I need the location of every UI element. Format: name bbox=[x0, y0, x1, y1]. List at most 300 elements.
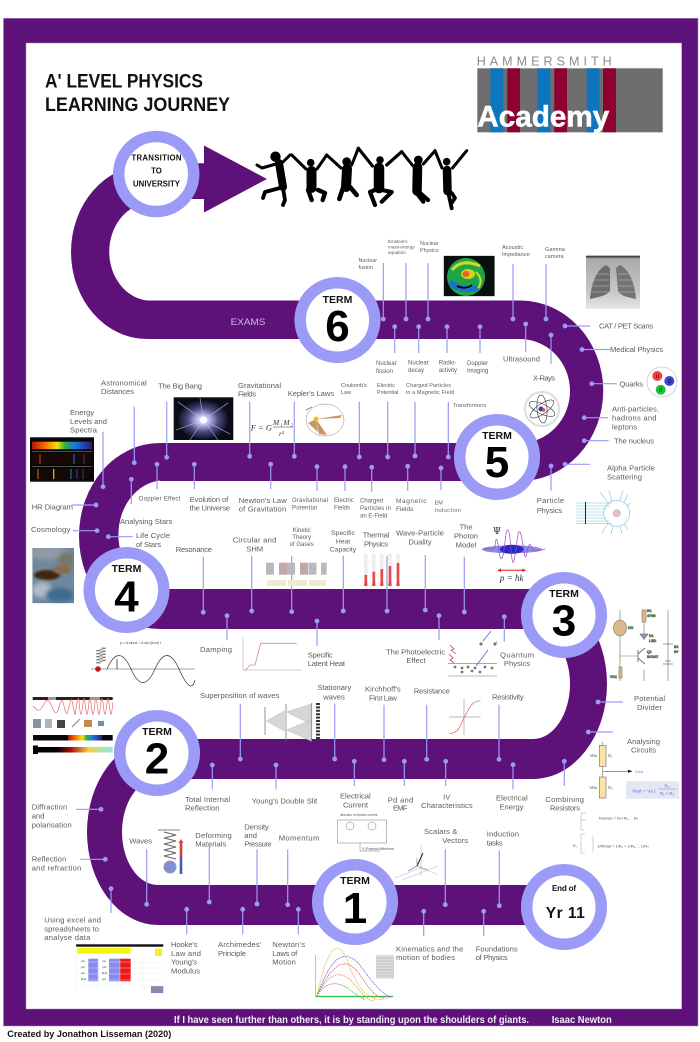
Medical Physics: Medical Physics bbox=[610, 345, 663, 354]
Reflection and refraction: and refraction bbox=[32, 863, 81, 872]
Newton's Laws of Motion: Motion bbox=[272, 958, 296, 967]
Induction tasks: Induction bbox=[487, 829, 519, 838]
Deforming Materials: Materials bbox=[195, 840, 227, 849]
formula: potential divider: R₂ bbox=[665, 784, 670, 788]
term 4 circle: 4 bbox=[114, 572, 139, 622]
Foundations of Physics bbox=[476, 909, 518, 962]
Charged Particles in a Magnetic Field bbox=[406, 383, 454, 458]
term 5 circle bbox=[460, 420, 534, 494]
Reflection and refraction: Reflection bbox=[32, 854, 66, 863]
Alpha Particle Scattering: Scattering bbox=[607, 472, 642, 482]
diagram: resistor potential divider: VRs bbox=[590, 785, 597, 790]
Diffraction and polarisation: and bbox=[32, 811, 44, 820]
Wave-Particle Duality: Wave-Particle bbox=[396, 529, 444, 538]
Energy Levels and Spectra: Spectra bbox=[70, 426, 98, 435]
Induction tasks: tasks bbox=[487, 838, 503, 847]
Potential Divider: Potential bbox=[634, 694, 665, 703]
journey ribbon bbox=[71, 165, 607, 925]
diagram: SHM graph bbox=[91, 641, 195, 686]
Evolution of the Universe: the Universe bbox=[190, 503, 230, 512]
diagram: Kepler's laws bbox=[306, 404, 344, 436]
Nuclear Physics: Physics bbox=[420, 248, 439, 254]
diagram: alpha scattering bbox=[576, 490, 630, 534]
Acoustic Impedance: Impedance bbox=[502, 252, 530, 258]
Anti-particles, hadrons and leptons: leptons bbox=[612, 422, 637, 431]
formula: potential divider bbox=[626, 781, 679, 799]
Electrical Current: Electrical bbox=[340, 792, 371, 801]
diagram: SHM graph: y = A sinωt = A sin√(k/m) t bbox=[120, 641, 161, 645]
icon: quarks: d bbox=[659, 388, 662, 394]
Pd and EMF: Pd and bbox=[388, 795, 413, 804]
Damping bbox=[200, 613, 232, 654]
Kepler's Laws: Kepler's Laws bbox=[288, 389, 334, 398]
Analysing Stars: Analysing Stars bbox=[120, 517, 173, 526]
Deforming Materials: Deforming bbox=[195, 831, 232, 840]
Kinematics and the motion of bodies: motion of bodies bbox=[396, 953, 455, 962]
Density and Pressure: Density bbox=[244, 822, 269, 831]
term 2 circle: TERM bbox=[142, 726, 172, 738]
Newton's Law of Gravitation bbox=[239, 462, 287, 514]
Analysing Circuits: Circuits bbox=[631, 745, 656, 754]
EM Induction bbox=[435, 466, 461, 514]
Radio-activity: Radio- bbox=[439, 360, 456, 366]
Potential Divider bbox=[596, 694, 665, 712]
Foundations of Physics: of Physics bbox=[476, 953, 508, 962]
Circular and SHM: SHM bbox=[246, 544, 263, 553]
diagram: transistor circuit: D1 bbox=[649, 634, 654, 638]
exams label: EXAMS bbox=[231, 317, 265, 328]
Charged Particles in an E-Field: an E-Field bbox=[360, 513, 387, 519]
IV Characteristics: Characteristics bbox=[421, 801, 473, 810]
Acoustic Impedance bbox=[502, 245, 530, 321]
Kinetic Theory of Gases: Kinetic bbox=[293, 528, 311, 534]
Nuclear Physics: Nuclear bbox=[420, 241, 439, 247]
Coulomb's Law: Law bbox=[341, 390, 351, 396]
icon: quarks: u bbox=[656, 374, 659, 380]
Analysing Stars bbox=[120, 477, 173, 526]
diagram: electric circuit: V (Potential difference) bbox=[362, 847, 394, 851]
Waves: Waves bbox=[129, 837, 152, 846]
image: emission spectra bbox=[30, 437, 94, 482]
Quarks bbox=[589, 380, 643, 389]
image: spreadsheet: μd bbox=[81, 971, 85, 975]
Transformers: Transformers bbox=[453, 403, 486, 409]
title: LEARNING JOURNEY bbox=[45, 95, 230, 116]
Anti-particles, hadrons and leptons: hadrons and bbox=[612, 414, 656, 422]
Superposition of waves bbox=[200, 691, 280, 761]
Astronomical Distances bbox=[101, 378, 147, 465]
formula: gravitation: r² bbox=[279, 429, 285, 438]
Ultrasound: Ultrasound bbox=[503, 355, 540, 364]
Cosmology bbox=[31, 525, 99, 534]
diagram: electric circuit: direction of electric current bbox=[340, 813, 377, 817]
Gravitational Fields: Gravitational bbox=[238, 381, 281, 390]
Kinematics and the motion of bodies: Kinematics and the bbox=[396, 944, 463, 953]
diagram: double slit interference bbox=[265, 703, 318, 742]
formula: gravitation: F = G bbox=[250, 422, 272, 432]
Coulomb's Law bbox=[341, 383, 367, 459]
diagram: wave packet: p = ħk bbox=[499, 573, 524, 583]
term 5 circle: TERM bbox=[482, 430, 512, 442]
Density and Pressure: and bbox=[244, 831, 257, 840]
image: spreadsheet: kHz bbox=[102, 971, 108, 975]
Kepler's Laws bbox=[288, 389, 334, 459]
Momentum: Momentum bbox=[279, 833, 319, 842]
diagram: transistor circuit: 9V bbox=[674, 650, 679, 654]
Magnetic Fields: Magnetic bbox=[396, 498, 427, 505]
Magnetic Fields: Fields bbox=[396, 506, 414, 513]
Newton's Laws of Motion bbox=[272, 907, 305, 967]
term 4 circle bbox=[89, 553, 164, 627]
Energy Levels and Spectra bbox=[70, 408, 107, 489]
formula: potential divider: R₁ + R₂ bbox=[660, 791, 675, 796]
term 6 circle bbox=[300, 283, 375, 357]
Analysing Circuits bbox=[586, 730, 660, 754]
Alpha Particle Scattering: Alpha Particle bbox=[607, 464, 655, 472]
Total Internal Reflection bbox=[185, 763, 230, 813]
Specific Heat Capacity bbox=[330, 530, 357, 613]
Doppler Imaging: Imaging bbox=[467, 368, 488, 374]
diagram: photoelectric effect bbox=[448, 631, 497, 676]
HR Diagram bbox=[32, 502, 98, 512]
Quantum Physics: Physics bbox=[504, 659, 530, 668]
Gravitational Potential bbox=[292, 464, 328, 512]
Reflection and refraction bbox=[32, 854, 108, 872]
Diffraction and polarisation bbox=[32, 803, 103, 829]
Total Internal Reflection: Total Internal bbox=[185, 795, 230, 804]
image: spreadsheet: μd bbox=[81, 965, 85, 969]
Nuclear fusion (upper): fusion bbox=[358, 265, 373, 271]
EM Induction: Induction bbox=[435, 508, 461, 514]
Life Cycle of Stars: Life Cycle bbox=[136, 531, 170, 540]
image: spreadsheet: mv bbox=[81, 959, 85, 963]
Newton's Laws of Motion: Laws of bbox=[272, 949, 298, 958]
The Photon Model: Model bbox=[456, 540, 477, 549]
formula: gravitation bbox=[250, 418, 293, 438]
title bbox=[45, 72, 230, 116]
diagram: transistor circuit: 470R bbox=[647, 614, 656, 618]
image: spreadsheet bbox=[76, 944, 163, 994]
The Photoelectric Effect bbox=[386, 613, 445, 665]
icon: atom bbox=[525, 392, 559, 426]
Nuclear fusion (upper): Nuclear bbox=[358, 258, 377, 264]
term 1 circle: 1 bbox=[343, 884, 367, 933]
Hooke's Law and Young's Modulus: Modulus bbox=[171, 967, 200, 976]
diagram: resistor potential divider: Vout bbox=[635, 769, 644, 774]
The Photoelectric Effect: The Photoelectric bbox=[386, 647, 445, 656]
term 5 topics bbox=[31, 378, 486, 549]
Alpha Particle Scattering bbox=[563, 462, 655, 482]
figure 5 bbox=[402, 151, 435, 202]
diagram: thermometers bbox=[364, 554, 400, 586]
Waves bbox=[129, 837, 152, 907]
Life Cycle of Stars: of Stars bbox=[136, 540, 161, 549]
diagram: transistor circuit: BC547 bbox=[647, 655, 658, 659]
diagram: wave packet bbox=[482, 527, 545, 583]
logo: Hammersmith Academy bbox=[477, 55, 663, 134]
term 1 topics bbox=[129, 822, 519, 976]
transition circle: TO bbox=[151, 167, 162, 176]
Damping: Damping bbox=[200, 645, 232, 654]
Kinetic Theory of Gases: Theory bbox=[292, 535, 311, 541]
Magnetic Fields bbox=[396, 464, 427, 513]
Scalars and Vectors: Vectors bbox=[442, 836, 468, 845]
image: spreadsheet: mv bbox=[102, 959, 106, 963]
Hooke's Law and Young's Modulus: Young's bbox=[171, 958, 197, 967]
Gamma camera: Gamma bbox=[545, 247, 566, 253]
Thermal Physics bbox=[363, 531, 390, 613]
The nucleus: The nucleus bbox=[614, 437, 654, 446]
term 6 topics bbox=[358, 239, 663, 515]
Newton's Law of Gravitation: Newton's Law bbox=[239, 496, 287, 505]
chart: projectile motion bbox=[315, 948, 394, 1001]
formula: potential divider: Vout = Vs ( bbox=[632, 788, 656, 794]
formula: combining resistors: Rseries = R₁+R₂ ... Rₙ bbox=[599, 816, 639, 820]
diagram: resistor potential divider: VRs bbox=[590, 753, 597, 758]
Kinematics and the motion of bodies bbox=[396, 909, 463, 962]
term 5 circle: 5 bbox=[485, 438, 509, 487]
Specific Latent Heat: Specific bbox=[308, 651, 333, 660]
quote footer: If I have seen further than others, it is by standing upon the shoulders of giants. bbox=[174, 1014, 529, 1026]
icon: quarks bbox=[647, 367, 677, 397]
Resistivity: Resistivity bbox=[492, 693, 524, 702]
Electrical Current bbox=[340, 759, 371, 809]
Energy Levels and Spectra: Levels and bbox=[70, 417, 107, 426]
Stationary waves: Stationary bbox=[317, 683, 352, 692]
Pd and EMF bbox=[388, 759, 413, 812]
Astronomical Distances: Astronomical bbox=[101, 378, 147, 388]
Medical Physics bbox=[580, 345, 663, 354]
Deforming Materials bbox=[195, 831, 232, 904]
Resonance bbox=[176, 545, 212, 615]
term 3 and 2 topics bbox=[32, 683, 665, 942]
Doppler Imaging bbox=[467, 324, 488, 374]
term 6 circle: TERM bbox=[323, 294, 353, 306]
HR Diagram: HR Diagram bbox=[32, 502, 73, 512]
Young's Double Slit bbox=[252, 763, 318, 805]
diagram: wave packet: Ψ bbox=[493, 527, 501, 537]
Density and Pressure bbox=[244, 822, 272, 906]
Combining Resistors bbox=[545, 759, 584, 813]
Electrical Energy: Electrical bbox=[496, 794, 528, 803]
Quantum Physics bbox=[500, 614, 534, 668]
Nuclear fission: fission bbox=[376, 369, 393, 375]
Anti-particles, hadrons and leptons: Anti-particles, bbox=[612, 404, 659, 414]
image: weather radar bbox=[444, 256, 495, 296]
figure 1 bbox=[257, 152, 290, 205]
term 2 circle bbox=[120, 716, 194, 790]
Hooke's Law and Young's Modulus: Law and bbox=[171, 949, 201, 958]
Energy Levels and Spectra: Energy bbox=[70, 408, 94, 417]
Charged Particles in an E-Field: Charged bbox=[360, 498, 383, 504]
diagram: IV curve bbox=[449, 699, 481, 735]
image: electromagnetic spectrum bbox=[33, 697, 113, 754]
term 6 circle: 6 bbox=[325, 302, 350, 351]
Charged Particles in an E-Field bbox=[360, 465, 391, 519]
Particle Physics bbox=[537, 464, 564, 515]
Diffraction and polarisation: Diffraction bbox=[32, 803, 67, 812]
Acoustic Impedance: Acoustic bbox=[502, 245, 523, 251]
icon: quarks: d bbox=[668, 379, 671, 385]
Gamma camera: camera bbox=[545, 254, 565, 260]
CAT / PET Scans bbox=[563, 322, 653, 331]
figure 3 bbox=[327, 148, 358, 199]
Kirchhoff's First Law: First Law bbox=[369, 694, 398, 703]
end of year 11 circle: End of bbox=[552, 884, 576, 893]
Doppler Effect: Doppler Effect bbox=[139, 496, 181, 502]
Hooke's Law and Young's Modulus bbox=[171, 907, 201, 976]
Electric Fields: Fields bbox=[334, 506, 350, 512]
Pd and EMF: EMF bbox=[393, 803, 408, 812]
diagram: resistor potential divider: R₁ bbox=[608, 753, 613, 758]
The Photon Model: The bbox=[459, 522, 473, 531]
Stationary waves bbox=[317, 683, 352, 761]
diagram: resistor potential divider bbox=[590, 742, 644, 799]
Foundations of Physics: Foundations bbox=[476, 944, 518, 953]
diagram: transistor circuit: R1 bbox=[647, 609, 652, 613]
Thermal Physics: Thermal bbox=[363, 531, 390, 540]
Scalars and Vectors: Scalars & bbox=[424, 827, 457, 836]
Charged Particles in a Magnetic Field: in a Magnetic Field bbox=[406, 390, 454, 396]
Cosmology: Cosmology bbox=[31, 525, 71, 534]
Einstein's mass-energy equation bbox=[388, 239, 415, 321]
title: A' LEVEL PHYSICS bbox=[45, 72, 203, 93]
end of year 11 circle: Yr 11 bbox=[546, 905, 585, 922]
diagram: gas cylinders bbox=[266, 563, 327, 586]
Electric Fields bbox=[334, 464, 354, 512]
Life Cycle of Stars bbox=[106, 531, 170, 549]
Nuclear decay: Nuclear bbox=[408, 360, 429, 366]
Charged Particles in an E-Field: Particles in bbox=[360, 506, 391, 512]
Induction tasks bbox=[487, 829, 519, 908]
figure 4 bbox=[358, 148, 402, 205]
EM Induction: EM bbox=[435, 500, 443, 506]
image: chest x-ray bbox=[586, 256, 640, 309]
Momentum bbox=[279, 833, 319, 907]
Total Internal Reflection: Reflection bbox=[185, 804, 220, 813]
diagram: transistor circuit: Q1 bbox=[647, 650, 652, 654]
Radio-activity: activity bbox=[439, 368, 457, 374]
Gamma camera bbox=[544, 247, 566, 321]
transition circle: UNIVERSITY bbox=[133, 180, 181, 189]
Nuclear fission bbox=[376, 324, 397, 375]
Electric Potential: Potential bbox=[377, 390, 398, 396]
Resistivity bbox=[492, 693, 524, 762]
Electric Potential: Electric bbox=[377, 383, 395, 389]
Gravitational Fields bbox=[238, 381, 281, 459]
The Big Bang: The Big Bang bbox=[158, 382, 202, 390]
Using excel and spreadsheets to analyse data: analyse data bbox=[44, 933, 91, 942]
Young's Double Slit: Young's Double Slit bbox=[252, 796, 318, 805]
end of year 11 circle bbox=[527, 870, 601, 944]
Radio-activity bbox=[439, 324, 457, 374]
Archimedes' Principle bbox=[218, 907, 262, 958]
Hooke's Law and Young's Modulus: Hooke's bbox=[171, 940, 198, 949]
Potential Divider: Divider bbox=[637, 703, 662, 712]
Diffraction and polarisation: polarisation bbox=[32, 820, 72, 829]
diagram: transistor circuit: LED bbox=[649, 639, 657, 643]
transition circle bbox=[119, 136, 194, 212]
Nuclear fission: Nuclear bbox=[376, 361, 397, 367]
diagram: resistor potential divider: R₂ bbox=[608, 785, 613, 790]
Electrical Current: Current bbox=[343, 800, 369, 809]
The Photoelectric Effect: Effect bbox=[406, 656, 427, 665]
Nuclear decay bbox=[408, 324, 429, 374]
Astronomical Distances: Distances bbox=[101, 387, 134, 396]
Doppler Imaging: Doppler bbox=[467, 361, 488, 367]
Kinetic Theory of Gases bbox=[289, 528, 314, 614]
diagram: transistor circuit bbox=[610, 609, 679, 681]
The Photon Model: Photon bbox=[454, 531, 478, 540]
Using excel and spreadsheets to analyse data: Using excel and bbox=[44, 916, 101, 925]
term 1 circle: TERM bbox=[340, 875, 370, 887]
Nuclear fusion (upper) bbox=[358, 258, 386, 321]
diagram: transistor circuit: B1 bbox=[674, 645, 679, 649]
Anti-particles, hadrons and leptons bbox=[582, 404, 659, 431]
Superposition of waves: Superposition of waves bbox=[200, 691, 280, 700]
Resistance: Resistance bbox=[414, 687, 450, 696]
quote footer: Isaac Newton bbox=[552, 1014, 612, 1026]
formula: combining resistors: 1/Rtotal = 1/R₁ + 1/R₂ ... 1/Rₙ bbox=[597, 844, 649, 848]
Particle Physics: Physics bbox=[537, 506, 562, 515]
Einstein's mass-energy equation: Einstein's bbox=[388, 239, 408, 244]
image: big bang bbox=[174, 397, 233, 440]
Nuclear Physics bbox=[420, 241, 439, 321]
Combining Resistors: Resistors bbox=[550, 804, 580, 813]
X-Rays: X-Rays bbox=[533, 373, 555, 382]
Electric Potential bbox=[377, 383, 398, 459]
formula: combining resistors: R₁ bbox=[573, 844, 578, 848]
Circular and SHM: Circular and bbox=[233, 536, 276, 545]
Circular and SHM bbox=[233, 536, 276, 613]
diagram: spring and mass bbox=[158, 830, 184, 874]
Kirchhoff's First Law bbox=[365, 685, 401, 762]
X-Rays bbox=[533, 333, 555, 382]
Specific Heat Capacity: Specific bbox=[331, 530, 355, 537]
Kinetic Theory of Gases: of Gases bbox=[290, 542, 314, 548]
Particle Physics: Particle bbox=[537, 496, 564, 505]
Combining Resistors: Combining bbox=[545, 795, 584, 804]
The nucleus bbox=[582, 437, 654, 446]
IV Characteristics bbox=[421, 759, 473, 810]
Einstein's mass-energy equation: equation bbox=[388, 250, 406, 255]
image: nebula bbox=[32, 548, 74, 604]
diagram: electric circuit bbox=[337, 813, 394, 851]
logo: Hammersmith Academy: Academy bbox=[477, 101, 610, 134]
Electrical Energy bbox=[496, 762, 528, 811]
Nuclear decay: decay bbox=[408, 368, 424, 374]
Einstein's mass-energy equation: mass-energy bbox=[388, 245, 415, 250]
Gravitational Potential: Gravitational bbox=[292, 498, 328, 504]
Electric Fields: Electric bbox=[334, 498, 354, 504]
Newton's Laws of Motion: Newton's bbox=[272, 940, 305, 949]
Ultrasound bbox=[503, 322, 540, 364]
image: spreadsheet: kHz bbox=[81, 977, 87, 981]
Archimedes' Principle: Principle bbox=[218, 949, 246, 958]
diagram: transistor circuit: DR bbox=[628, 626, 634, 630]
Resistance bbox=[414, 687, 450, 762]
CAT / PET Scans: CAT / PET Scans bbox=[599, 322, 653, 331]
image: spreadsheet: μd bbox=[102, 977, 106, 981]
term 3 circle bbox=[527, 578, 601, 652]
Specific Latent Heat: Latent Heat bbox=[308, 659, 346, 668]
author credit: Created by Jonathon Lisseman (2020) bbox=[7, 1029, 171, 1039]
The Photon Model bbox=[454, 522, 478, 614]
term 4 topics bbox=[176, 522, 534, 668]
term 1 circle bbox=[318, 865, 392, 939]
Gravitational Potential: Potential bbox=[292, 506, 317, 512]
transition circle: TRANSITION bbox=[132, 153, 182, 162]
